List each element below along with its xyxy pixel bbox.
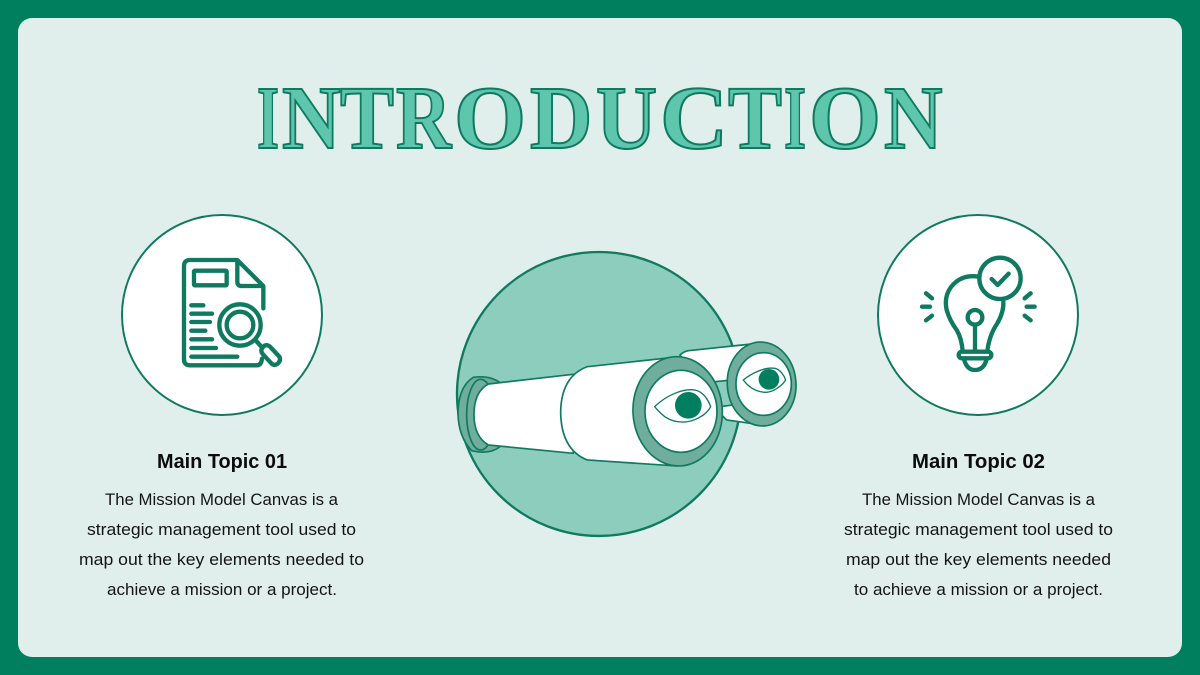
back tube (680, 344, 762, 425)
illustration: binoculars with eyes (457, 252, 799, 536)
title: O (809, 68, 881, 168)
panel: topic 02 (844, 215, 1113, 599)
title: N (884, 68, 942, 168)
title: N (282, 68, 340, 168)
heading: topic 02: Main Topic 02 (912, 451, 1045, 473)
title: I (784, 69, 806, 168)
title: U (596, 68, 657, 168)
text block: topic 01: The Mission Model Canvas is a (105, 490, 339, 509)
front lens glass (645, 370, 717, 452)
title (257, 68, 942, 168)
title: D (530, 68, 592, 168)
panel: topic 01 (79, 215, 364, 599)
title: C (660, 68, 728, 168)
title: O (454, 68, 526, 168)
icon circle: topic 02 (878, 215, 1078, 415)
icon: light bulb with check (922, 258, 1035, 370)
back eye (743, 368, 786, 392)
text block: topic 01: strategic management tool used to (87, 520, 356, 539)
background circle (457, 252, 741, 536)
back lens rim (724, 340, 799, 428)
icon circle: topic 01 (122, 215, 322, 415)
eyepiece outer (458, 377, 500, 452)
text block: topic 02: to achieve a mission or a project. (854, 580, 1103, 599)
text block: topic 02 (844, 490, 1113, 599)
wide tube (561, 357, 680, 466)
text block: topic 01: map out the key elements needed to (79, 550, 364, 569)
eyepiece ridge (467, 379, 495, 450)
text block: topic 02: strategic management tool used to (844, 520, 1113, 539)
back lens glass (736, 353, 791, 415)
text block: topic 01 (79, 490, 364, 599)
title: T (728, 68, 782, 168)
text block: topic 02: The Mission Model Canvas is a (862, 490, 1096, 509)
tube connector (715, 380, 733, 407)
front eye (655, 390, 711, 422)
heading: topic 01: Main Topic 01 (157, 451, 287, 473)
title: R (396, 69, 453, 168)
icon: document with magnifier (184, 260, 280, 365)
front lens rim (630, 354, 725, 468)
title: T (340, 68, 394, 168)
text block: topic 01: achieve a mission or a project. (107, 580, 337, 599)
title: I (257, 69, 279, 168)
narrow tube (474, 374, 573, 453)
text block: topic 02: map out the key elements needed (846, 550, 1111, 569)
